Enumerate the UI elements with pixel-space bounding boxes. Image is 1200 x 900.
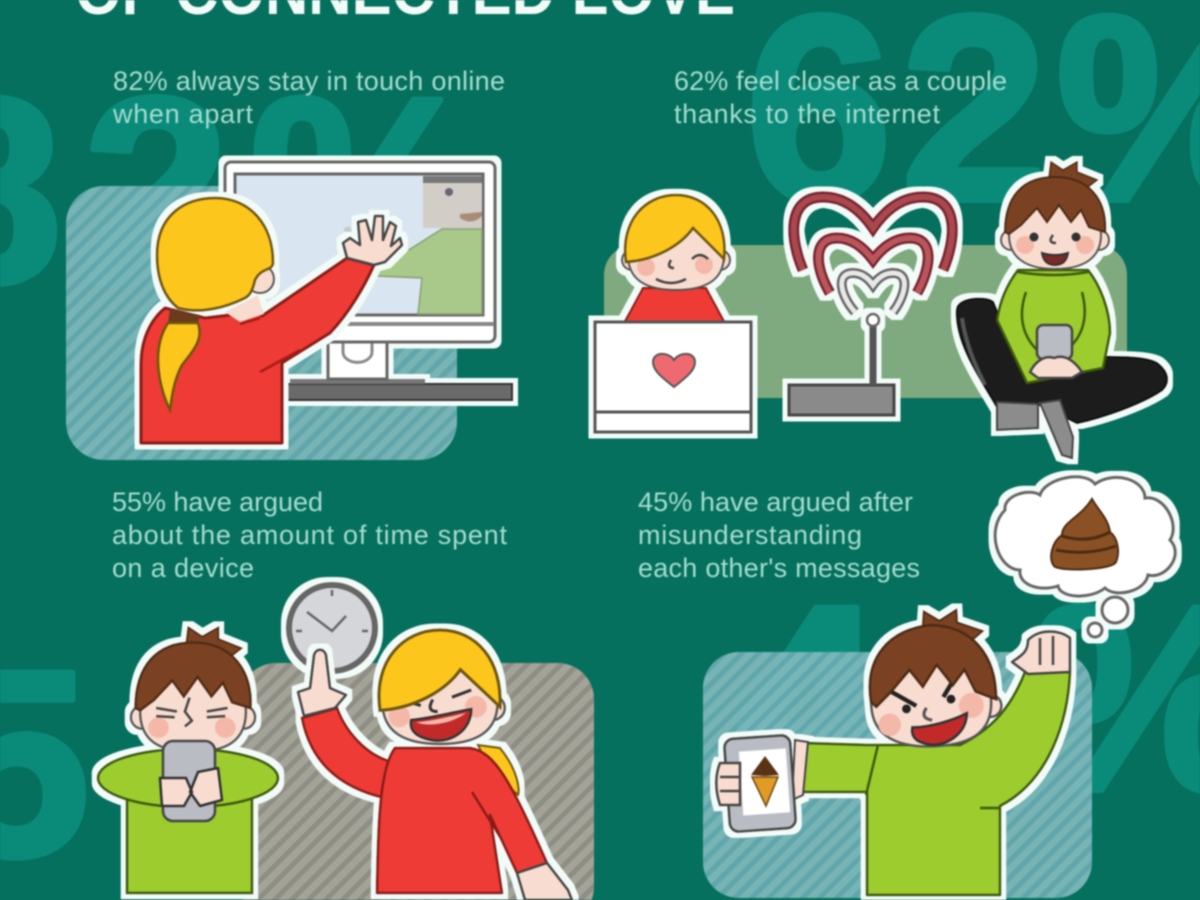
icon: thought bubble with poop [995,477,1175,637]
text: 55%: 55% have argued [112,487,323,517]
text: messages: each other's messages [638,553,920,583]
text: misunderstanding: misunderstanding [638,520,862,550]
text: amount: about the amount of time spent [112,520,507,550]
figure: sitting boy with phone [957,162,1167,458]
icon: monitor and desk [225,162,512,400]
figure: girl pointing at clock [298,630,572,900]
text: 82%: 82% always stay in touch online [113,66,505,96]
figure: girl from behind [141,198,402,443]
text: 45%: 45% have argued after [638,487,913,517]
figure: boy looking at phone [98,628,278,893]
icon: wifi heart router [789,197,952,415]
panel: blue hatch 1 [66,186,457,460]
big number 45%: four: 4 [735,551,884,847]
panel: blue hatch 4 [703,652,1092,898]
panel: green 2 [604,245,1127,398]
text: when apart: when apart [112,99,253,129]
text: device: on a device [112,553,254,583]
icon: wall clock [289,585,375,671]
text: 62%: 62% feel closer as a couple [674,66,1007,96]
figure: angry boy with phone and fist [716,608,1070,895]
icon: poop [1051,499,1118,569]
panel: grey hatch 3 [240,663,594,900]
text: thanks: thanks to the internet [674,99,940,129]
icon: laptop with girl [595,195,751,432]
